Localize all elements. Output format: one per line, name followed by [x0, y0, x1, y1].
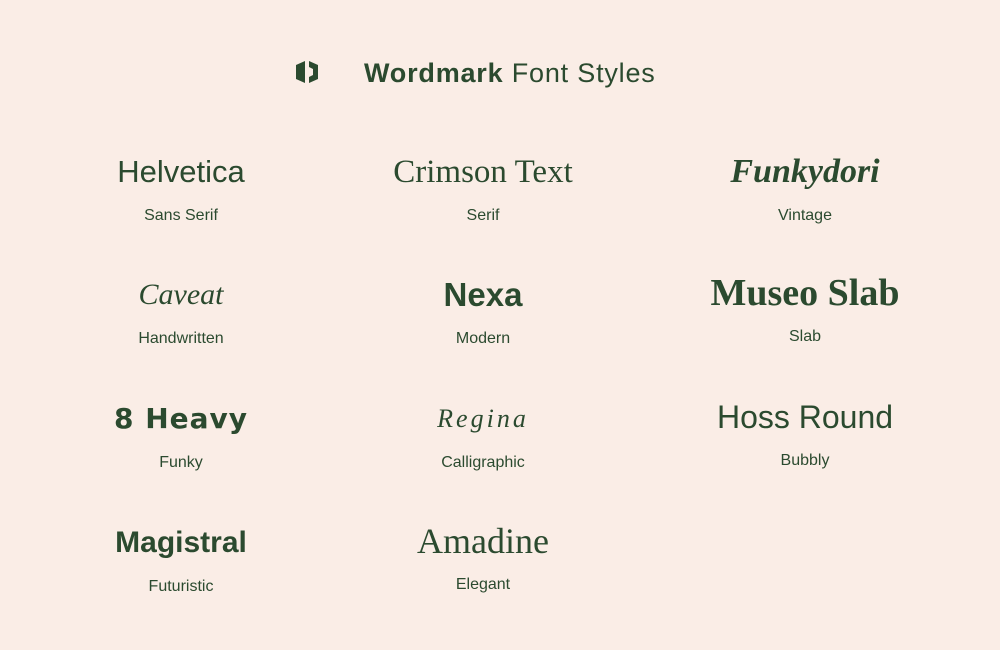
- item: Museo Slab: [710, 272, 899, 345]
- item: Amadine: Amadine: [417, 521, 549, 561]
- item: Crimson Text: Crimson Text: [393, 154, 573, 190]
- item: Helvetica: Sans Serif: [144, 207, 218, 224]
- item: Crimson Text: [393, 154, 573, 224]
- item: Museo Slab: Slab: [789, 328, 821, 345]
- item: Hoss Round: Hoss Round: [717, 399, 893, 435]
- item: Regina: Regina: [437, 404, 529, 433]
- item: Helvetica: [117, 154, 245, 224]
- item: Funkydori: [730, 153, 880, 224]
- item: 8 Heavy: Funky: [159, 454, 203, 471]
- item: Magistral: Futuristic: [149, 578, 213, 595]
- item: Hoss Round: [717, 399, 893, 469]
- item: Magistral: Magistral: [115, 526, 247, 559]
- item: Magistral: [115, 526, 247, 595]
- item: Caveat: [138, 278, 224, 347]
- item: Hoss Round: Bubbly: [781, 452, 829, 469]
- item: 8 Heavy: [114, 402, 248, 471]
- item: Regina: Calligraphic: [441, 454, 525, 471]
- title: Wordmark Font Styles: [364, 58, 656, 88]
- item: Crimson Text: Serif: [467, 207, 499, 224]
- item: 8 Heavy: 8 Heavy: [114, 402, 248, 435]
- item: Regina: [437, 404, 529, 471]
- item: Nexa: [444, 276, 523, 347]
- item: Amadine: Elegant: [456, 576, 510, 593]
- item: Helvetica: Helvetica: [117, 154, 245, 189]
- item: Amadine: [417, 521, 549, 593]
- item: Nexa: Nexa: [444, 276, 522, 313]
- item: Caveat: Handwritten: [138, 330, 224, 347]
- item: Nexa: Modern: [456, 330, 510, 347]
- logo icon: [296, 61, 318, 83]
- item: Funkydori: Funkydori: [730, 153, 880, 190]
- item: Caveat: Caveat: [138, 278, 223, 311]
- item: Museo Slab: Museo Slab: [710, 272, 899, 314]
- item: Funkydori: Vintage: [778, 207, 832, 224]
